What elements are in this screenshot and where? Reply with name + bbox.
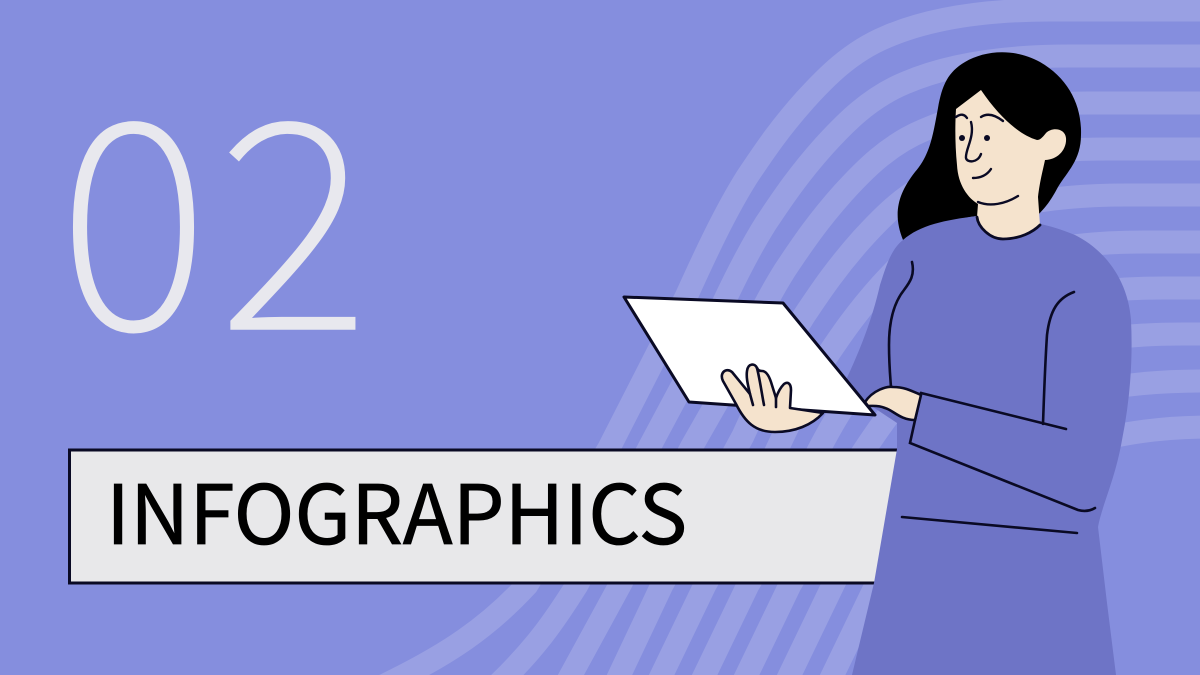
left hand [722,365,823,432]
banner title text: INFOGRAPHICS [106,449,687,568]
tablet [624,297,875,415]
face and neck [955,90,1066,239]
banner box [70,450,910,583]
hair [898,52,1081,240]
sweater body [846,216,1132,675]
section number: 02 [59,0,379,411]
sweater lines [889,262,1095,533]
illustration: woman holding tablet [624,52,1132,675]
background curved stripes [370,10,1200,675]
title banner [70,449,910,583]
right hand [865,387,921,420]
facial features [956,115,1040,239]
